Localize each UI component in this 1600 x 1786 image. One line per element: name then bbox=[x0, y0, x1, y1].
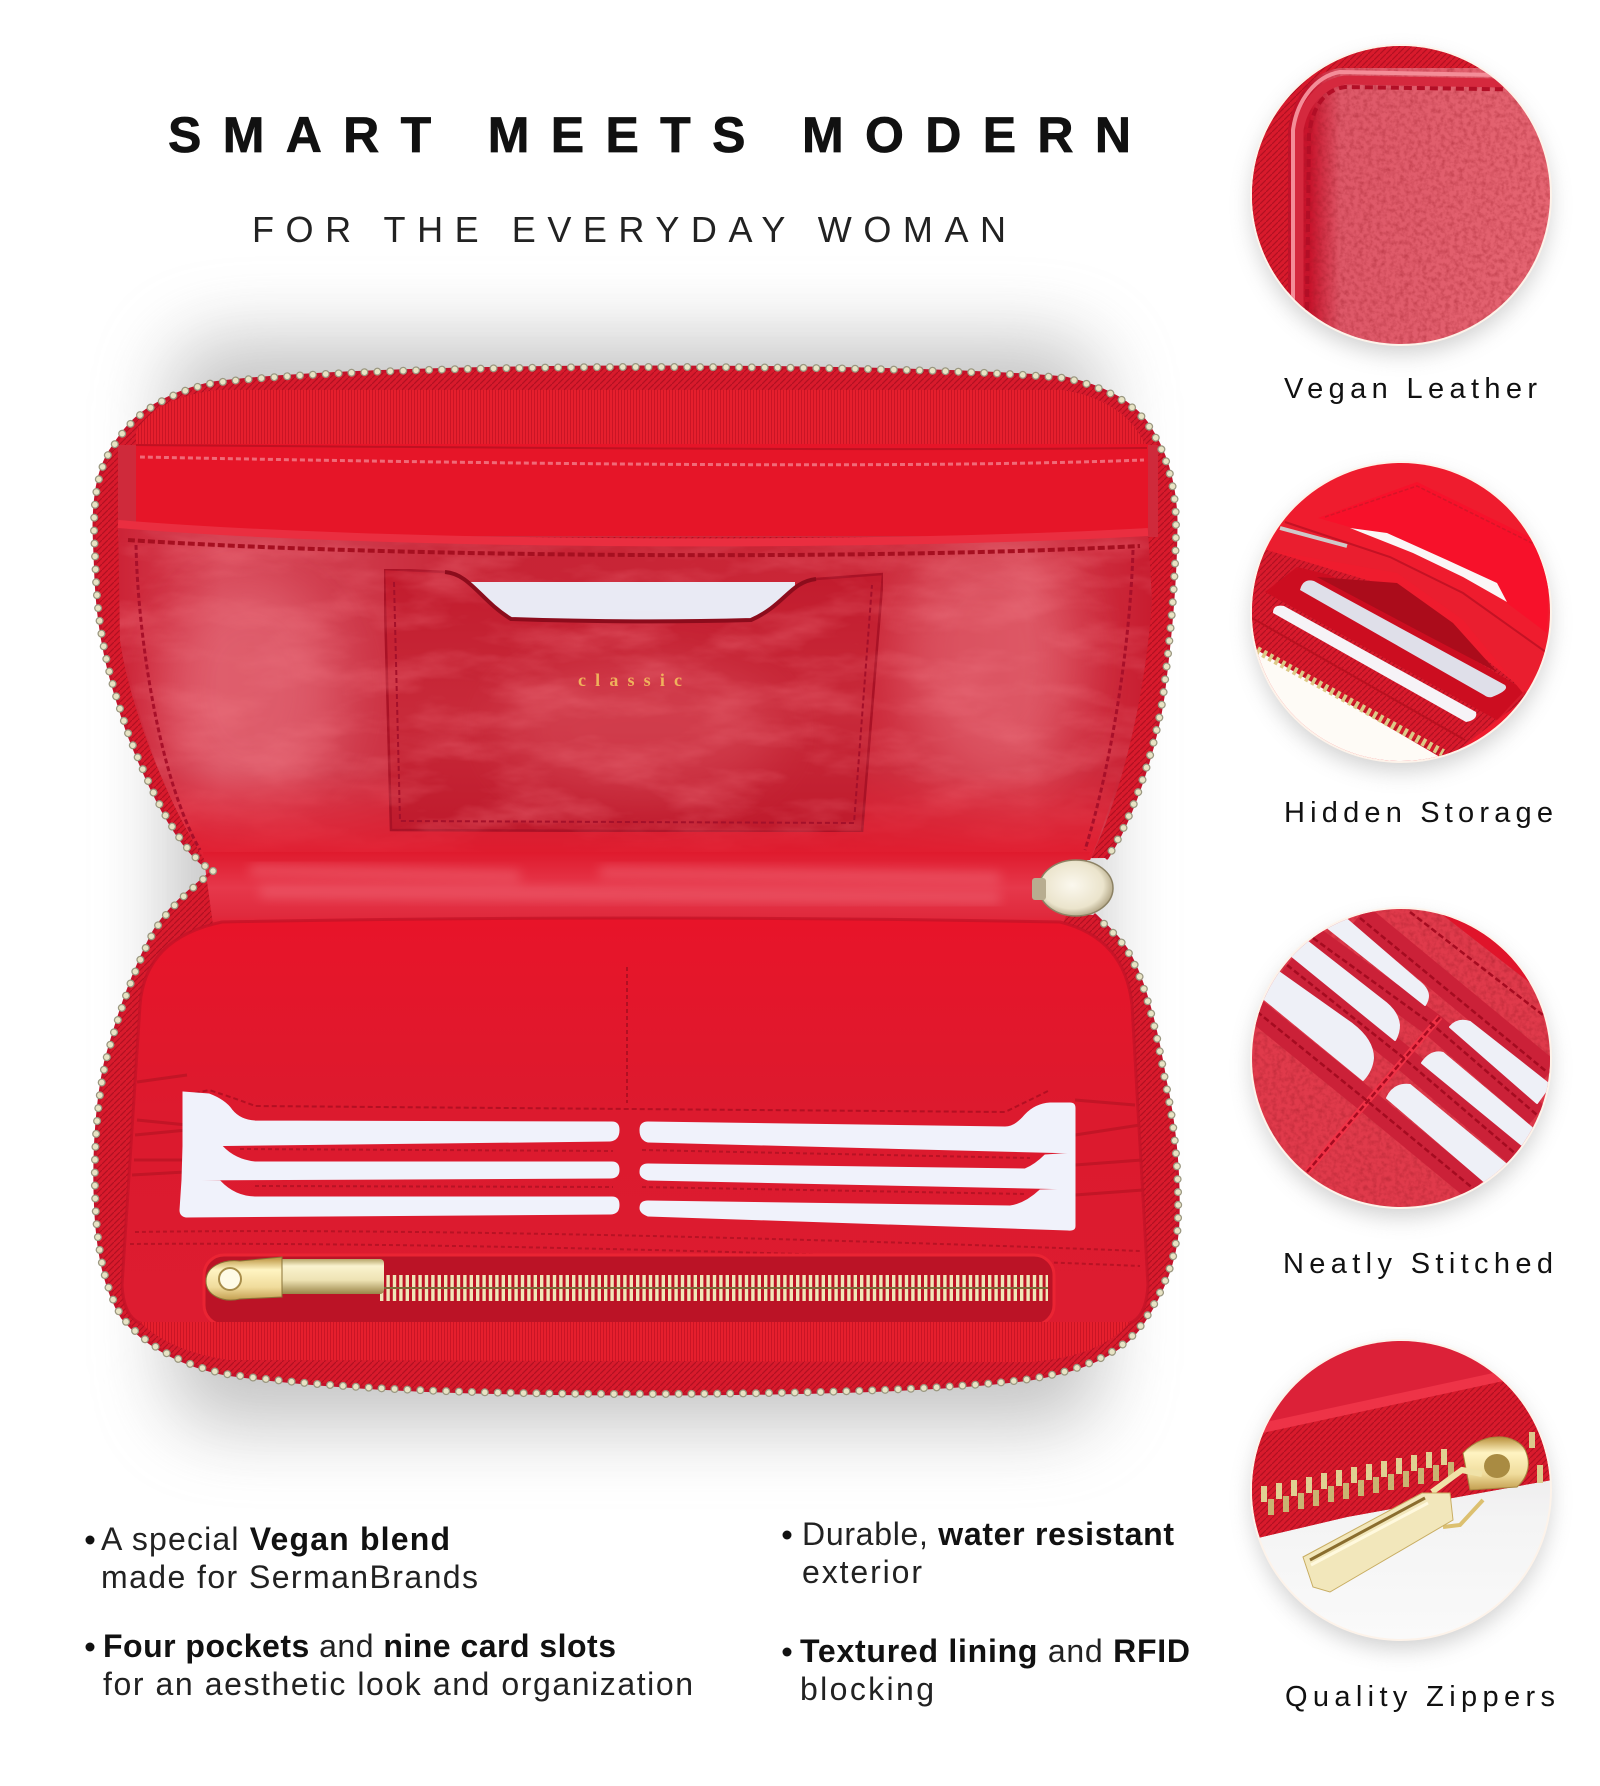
bullet: water resistant: exterior bbox=[802, 1554, 922, 1590]
wallet: white cards in slots bbox=[180, 1092, 1075, 1230]
wallet: snap button bbox=[1032, 860, 1113, 916]
wallet: classic logo: classic bbox=[578, 670, 682, 690]
zipper teeth bbox=[1257, 650, 1443, 753]
circle: hidden storage bbox=[1250, 461, 1552, 771]
circle: vegan leather bbox=[1250, 44, 1552, 354]
wallet: main pocket bbox=[118, 522, 1160, 862]
wallet: upper leather band bbox=[118, 444, 1158, 537]
lower pocket band bbox=[1514, 651, 1545, 692]
wallet: card slot stitching bbox=[130, 1149, 1140, 1266]
bullet: pockets and card slots bbox=[86, 1628, 693, 1702]
bullet: pockets and card slots: Four pockets and nine card slots bbox=[103, 1628, 616, 1664]
ribs bbox=[1250, 915, 1550, 1190]
bullet: water resistant bbox=[782, 1516, 1174, 1590]
zipper pull tab bbox=[1303, 1493, 1453, 1592]
flap bbox=[1318, 482, 1550, 633]
wallet shadow bbox=[170, 340, 1100, 1425]
wallet: lower leather panel bbox=[122, 918, 1148, 1325]
card in pocket bbox=[465, 582, 795, 622]
bullet: water resistant: Durable, water resistant bbox=[802, 1516, 1174, 1552]
wallet: top grosgrain lining bbox=[136, 390, 1147, 448]
cream area under zipper bbox=[1257, 650, 1442, 761]
bullet: vegan blend: made for SermanBrands bbox=[101, 1559, 478, 1595]
wallet: zip pocket bbox=[204, 1255, 1054, 1325]
zipper slider bbox=[1463, 1437, 1528, 1490]
bullet: textured lining bbox=[782, 1633, 1190, 1707]
wallet: outer zipper teeth bbox=[94, 367, 1178, 1394]
label: neatly stitched: Neatly Stitched bbox=[1283, 1248, 1553, 1280]
bullet: textured lining: Textured lining and RFID bbox=[800, 1633, 1190, 1669]
bullet: vegan blend bbox=[86, 1521, 478, 1595]
wallet: bottom grosgrain lining bbox=[140, 1322, 1130, 1362]
wallet bbox=[94, 367, 1178, 1394]
wallet: zipper tape body bbox=[94, 367, 1178, 1394]
herringbone tape bbox=[1250, 550, 1530, 760]
wallet: hinge bbox=[203, 852, 1090, 932]
bullet: vegan blend: A special Vegan blend bbox=[101, 1521, 450, 1557]
zipper tape corner bbox=[1442, 914, 1530, 983]
white stripes bbox=[1264, 919, 1548, 1182]
hidden card 2 bbox=[1273, 606, 1476, 722]
hidden card 1 bbox=[1300, 580, 1506, 697]
subtitle: FOR THE EVERYDAY WOMAN bbox=[252, 209, 1006, 250]
card window frame bbox=[1265, 567, 1525, 720]
circle: neatly stitched bbox=[1240, 896, 1552, 1217]
label: hidden storage: Hidden Storage bbox=[1284, 797, 1553, 829]
wallet: side card slots bbox=[132, 1075, 1143, 1195]
label: vegan leather: Vegan Leather bbox=[1284, 373, 1537, 405]
wallet: card pocket bbox=[384, 569, 883, 832]
label: quality zippers: Quality Zippers bbox=[1285, 1681, 1555, 1713]
bullet: pockets and card slots: for an aesthetic look and organization bbox=[103, 1666, 693, 1702]
bullet: textured lining: blocking bbox=[800, 1671, 934, 1707]
stitching bbox=[1250, 912, 1547, 1190]
white sliver bbox=[1350, 528, 1507, 602]
zipper teeth bbox=[1264, 1449, 1444, 1502]
title: SMART MEETS MODERN bbox=[168, 107, 1131, 163]
wallet: zip puller bbox=[206, 1257, 384, 1300]
circle: quality zippers bbox=[1250, 1339, 1552, 1649]
dark inner wedge bbox=[1317, 577, 1497, 672]
